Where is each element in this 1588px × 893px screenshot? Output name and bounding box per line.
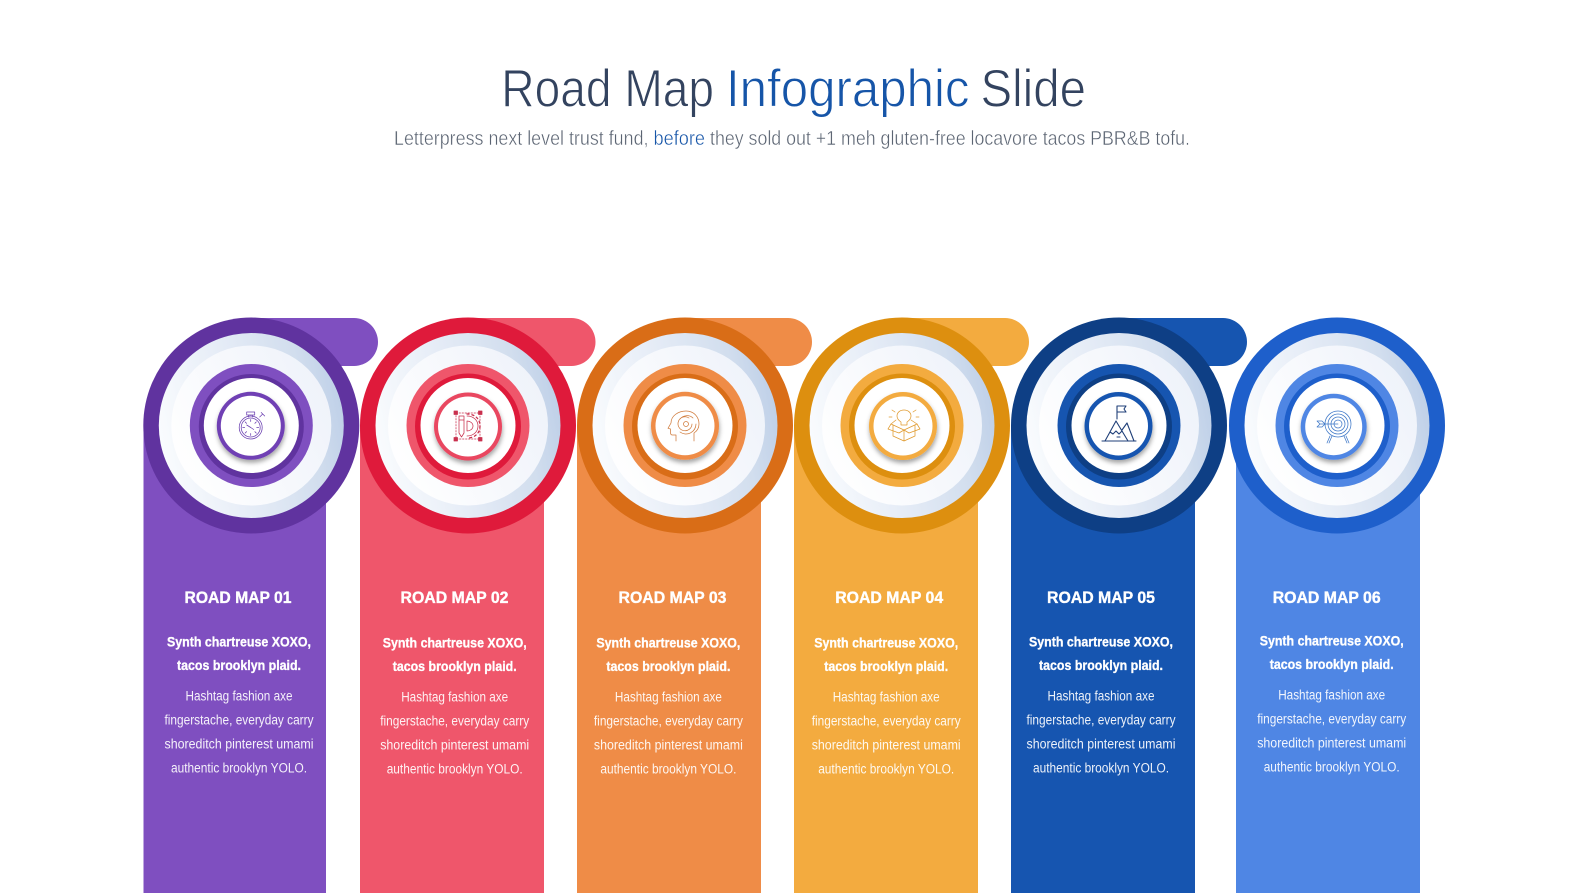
icon: stopwatch [239, 412, 265, 439]
text: road map 06: ROAD MAP 06 [1273, 589, 1381, 607]
title [501, 60, 1086, 118]
badge: road map 01 [143, 318, 359, 534]
text: road map 04: authentic brooklyn YOLO. [818, 762, 954, 777]
text: road map 05: tacos brooklyn plaid. [1039, 658, 1163, 673]
column: road map 05 [1011, 425, 1195, 893]
text: road map 05: ROAD MAP 05 [1047, 589, 1155, 607]
title: Slide [980, 60, 1086, 118]
text: road map 02: ROAD MAP 02 [400, 589, 508, 607]
panel: road map 01 [143, 318, 378, 893]
text: road map 02: authentic brooklyn YOLO. [387, 762, 523, 777]
panel: road map 04 [794, 318, 1029, 893]
text: road map 04: Synth chartreuse XOXO, [814, 636, 958, 650]
text: road map 02: Synth chartreuse XOXO, [383, 636, 527, 650]
text: road map 01: authentic brooklyn YOLO. [171, 761, 307, 776]
tab: road map 04 [902, 318, 1029, 366]
text: road map 04: shoreditch pinterest umami [812, 738, 961, 753]
icon: mountain with flag [1102, 406, 1136, 441]
tab: road map 03 [685, 318, 812, 366]
subtitle: before [654, 128, 705, 150]
text: road map 03: Hashtag fashion axe [615, 690, 722, 705]
text: road map 05: Hashtag fashion axe [1048, 689, 1154, 704]
column: road map 01 [144, 425, 326, 893]
badge: road map 04 [794, 318, 1010, 534]
column: road map 02 [360, 425, 544, 893]
text: road map 01: tacos brooklyn plaid. [177, 658, 301, 673]
text: road map 03: authentic brooklyn YOLO. [600, 762, 736, 777]
text: road map 04: Hashtag fashion axe [833, 690, 940, 705]
panel: road map 05 [1011, 318, 1247, 893]
badge: road map 02 [360, 318, 576, 534]
icon: head with maze [668, 411, 699, 441]
text: road map 02: shoreditch pinterest umami [380, 738, 529, 753]
text: road map 02 [380, 589, 529, 777]
text: road map 04 [812, 589, 961, 777]
text: road map 03: tacos brooklyn plaid. [606, 659, 730, 674]
text: road map 06: fingerstache, everyday carry [1257, 712, 1406, 727]
tab: road map 01 [251, 318, 378, 366]
icon: design tool [454, 411, 482, 441]
text: road map 01: shoreditch pinterest umami [164, 737, 314, 752]
text: road map 05: Synth chartreuse XOXO, [1029, 634, 1173, 650]
text: road map 03 [594, 589, 743, 777]
text: road map 01: Hashtag fashion axe [186, 689, 292, 704]
text: road map 03: shoreditch pinterest umami [594, 738, 743, 753]
text: road map 06: shoreditch pinterest umami [1257, 736, 1406, 751]
column: road map 06 [1236, 425, 1420, 893]
panel: road map 06 [1229, 318, 1445, 893]
text: road map 01: fingerstache, everyday carry [164, 713, 314, 728]
subtitle [394, 128, 1190, 150]
text: road map 01 [164, 589, 314, 776]
text: road map 04: tacos brooklyn plaid. [824, 659, 948, 674]
text: road map 05 [1026, 589, 1176, 776]
text: road map 06: Hashtag fashion axe [1278, 688, 1385, 703]
tab: road map 05 [1119, 318, 1247, 366]
text: road map 01: Synth chartreuse XOXO, [167, 634, 311, 650]
text: road map 03: ROAD MAP 03 [618, 589, 726, 607]
text: road map 06: Synth chartreuse XOXO, [1260, 634, 1404, 648]
panel: road map 02 [360, 318, 596, 893]
badge: road map 03 [577, 318, 793, 534]
text: road map 02: fingerstache, everyday carry [380, 714, 529, 729]
text: road map 04: ROAD MAP 04 [835, 589, 944, 607]
text: road map 04: fingerstache, everyday carry [812, 714, 961, 729]
column: road map 03 [577, 425, 761, 893]
text: road map 05: authentic brooklyn YOLO. [1033, 761, 1169, 776]
icon: target with arrow [1317, 411, 1351, 443]
text: road map 05: fingerstache, everyday carry [1026, 713, 1176, 728]
badge: road map 05 [1011, 318, 1227, 534]
text: road map 06 [1257, 589, 1406, 775]
text: road map 06: authentic brooklyn YOLO. [1264, 760, 1400, 775]
text: road map 03: Synth chartreuse XOXO, [596, 636, 740, 650]
text: road map 01: ROAD MAP 01 [184, 589, 292, 607]
panel: road map 03 [577, 318, 812, 893]
icon: box with lightbulb [888, 410, 920, 441]
badge: road map 06 [1229, 318, 1445, 534]
title: Infographic [726, 60, 970, 118]
tab: road map 02 [468, 318, 596, 366]
text: road map 02: tacos brooklyn plaid. [393, 659, 517, 674]
subtitle: they sold out +1 meh gluten-free locavore tacos PBR&B tofu. [710, 128, 1190, 150]
subtitle: Letterpress next level trust fund, [394, 128, 648, 150]
text: road map 06: tacos brooklyn plaid. [1270, 657, 1394, 672]
title: Road Map [501, 60, 714, 118]
text: road map 02: Hashtag fashion axe [401, 690, 508, 705]
text: road map 03: fingerstache, everyday carry [594, 714, 743, 729]
text: road map 05: shoreditch pinterest umami [1026, 737, 1176, 752]
column: road map 04 [794, 425, 978, 893]
